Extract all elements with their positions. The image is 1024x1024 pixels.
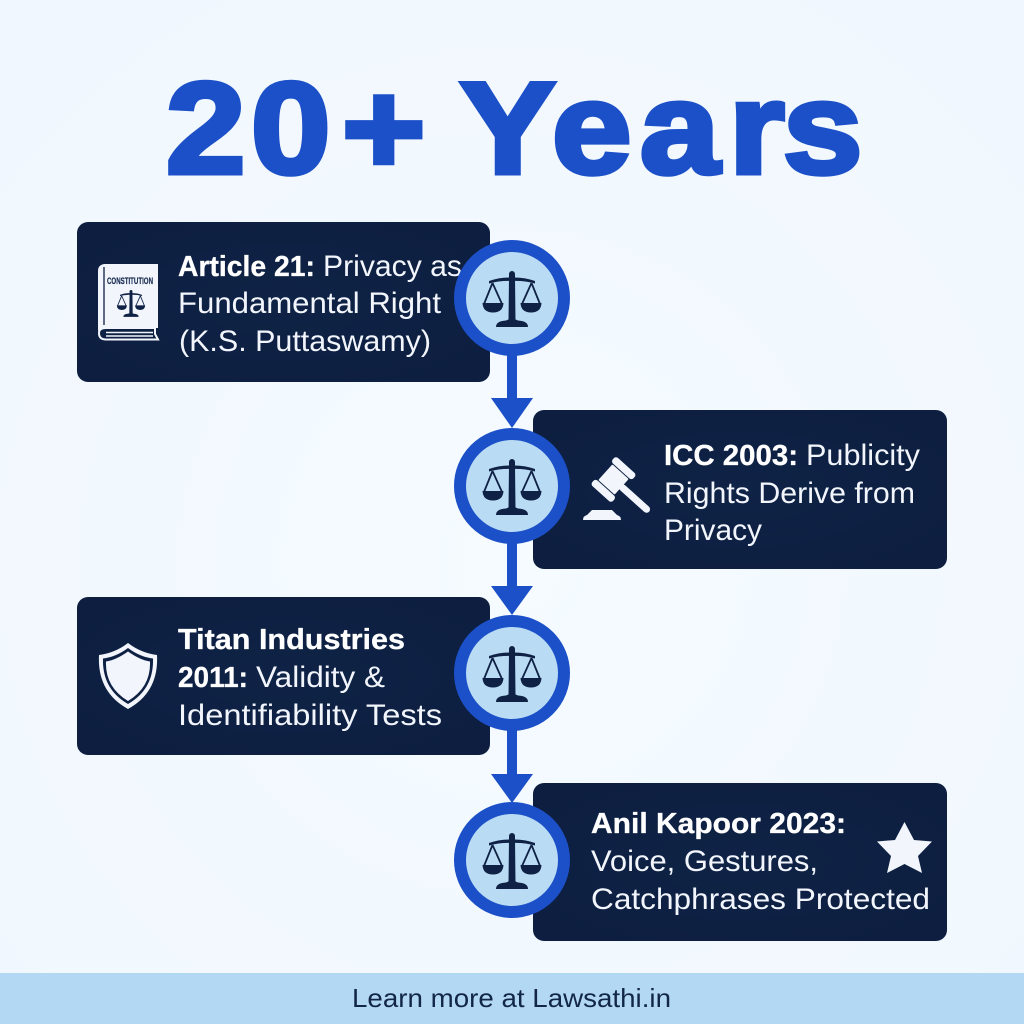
text: ICC 2003 — [664, 439, 920, 547]
panel: Article 21 — [77, 222, 490, 382]
icon: shield — [99, 643, 157, 709]
timeline node 2 — [460, 434, 564, 538]
arrow: step 2 to 3 — [491, 540, 533, 615]
icon: gavel — [583, 456, 662, 526]
icon: star — [877, 822, 932, 873]
arrow: step 1 to 2 — [491, 350, 533, 428]
text: ICC 2003: Privacy — [664, 514, 762, 547]
title: 20+ Years — [166, 55, 863, 201]
text: ICC 2003: ICC 2003: — [664, 440, 798, 472]
text: Anil Kapoor: Voice, Gestures, — [591, 845, 818, 878]
timeline node 1 — [460, 246, 564, 350]
icon: constitution book — [98, 264, 158, 340]
text: Article 21 — [178, 250, 462, 358]
text: Titan Industries: Identifiability Tests — [178, 699, 442, 732]
panel: ICC 2003 — [533, 410, 947, 569]
text: Article 21: Article 21: — [178, 251, 315, 283]
panel: Titan Industries — [77, 597, 490, 755]
text: Anil Kapoor: Catchphrases Protected — [591, 883, 930, 916]
text: ICC 2003: Publicity — [806, 439, 920, 472]
text: Titan Industries: Titan Industries — [178, 624, 405, 656]
text: Article 21: Privacy as — [323, 250, 462, 283]
text: Article 21: (K.S. Puttaswamy) — [179, 325, 431, 358]
text: ICC 2003: Rights Derive from — [664, 477, 915, 510]
text: Anil Kapoor: Anil Kapoor 2023: — [591, 808, 846, 840]
timeline node 4 — [460, 808, 564, 912]
text: Article 21: Fundamental Right — [178, 287, 442, 320]
text: Anil Kapoor — [591, 808, 930, 916]
text: Titan Industries: 2011: — [178, 662, 248, 694]
text: Titan Industries — [178, 624, 442, 732]
icon: constitution book: CONSTITUTION — [107, 276, 153, 286]
footer band — [0, 973, 1024, 1024]
timeline node 3 — [460, 621, 564, 725]
footer text: Learn more at Lawsathi.in — [352, 983, 671, 1013]
panel: Anil Kapoor — [533, 783, 947, 941]
arrow: step 3 to 4 — [491, 728, 533, 803]
text: Titan Industries: Validity & — [256, 661, 385, 694]
